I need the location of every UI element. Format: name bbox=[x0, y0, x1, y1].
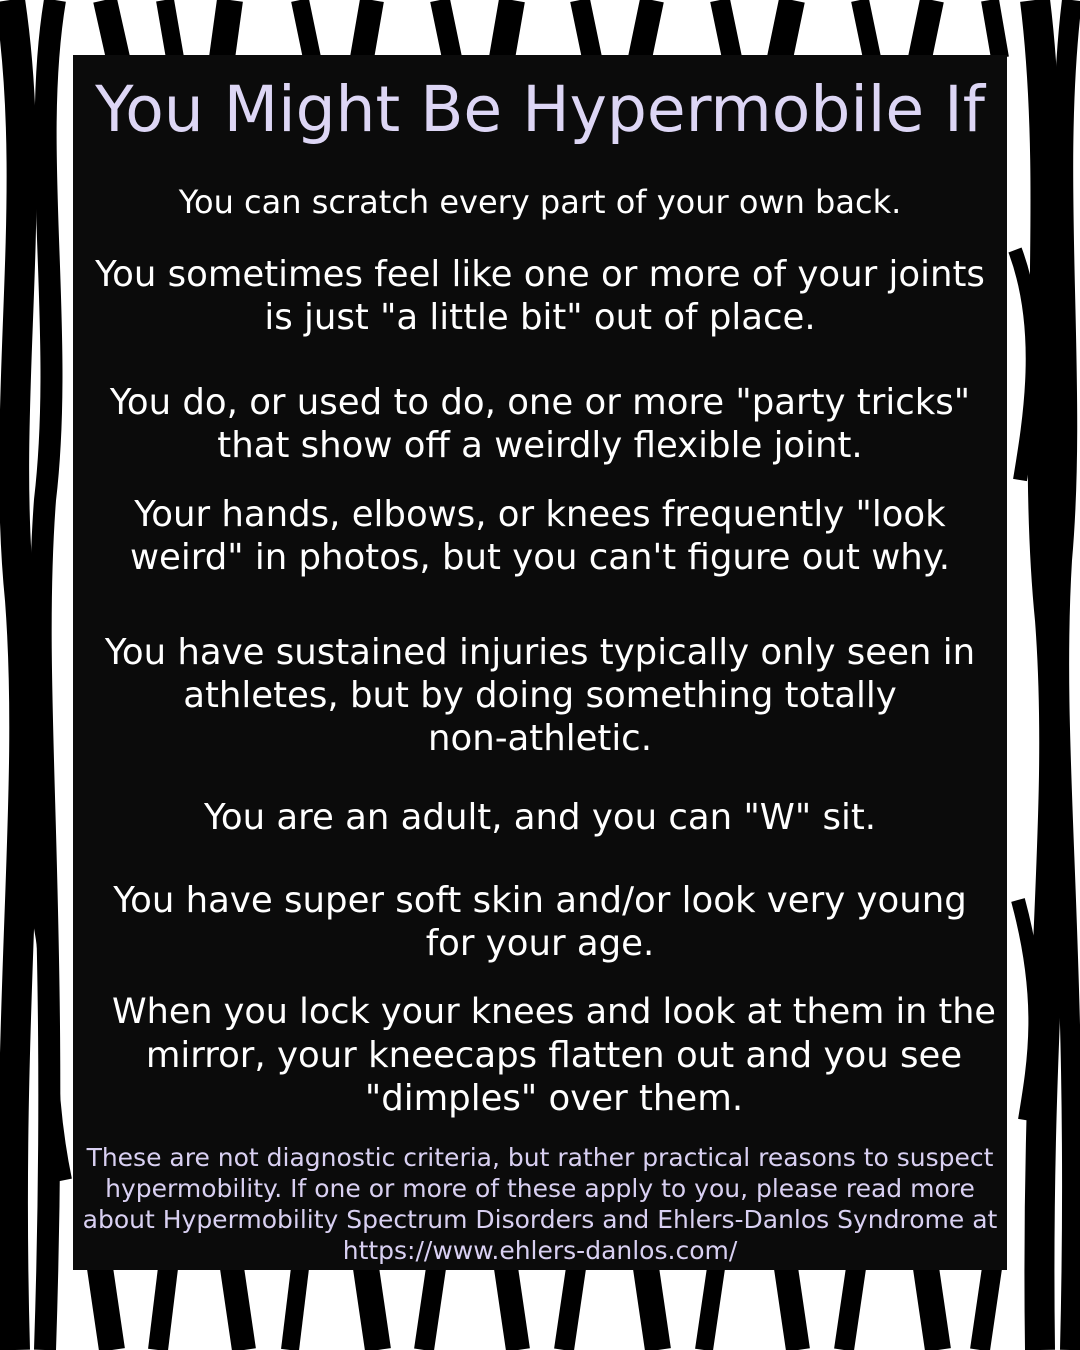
footer disclaimer: https://www.ehlers-danlos.com/ bbox=[343, 1236, 737, 1265]
item: joints out of place bbox=[95, 254, 985, 338]
item: soft skin bbox=[113, 880, 967, 964]
item: knee dimples bbox=[112, 992, 996, 1119]
item: knee dimples: mirror, your kneecaps flatten out and you see bbox=[146, 1035, 962, 1076]
panel: main list bbox=[73, 55, 1007, 1270]
item: soft skin: for your age. bbox=[426, 923, 654, 964]
item: party tricks: that show off a weirdly flexible joint. bbox=[217, 425, 863, 466]
item: athlete injuries: non-athletic. bbox=[428, 718, 652, 759]
item: athlete injuries: athletes, but by doing something totally bbox=[183, 675, 897, 716]
item: party tricks: You do, or used to do, one or more "party tricks" bbox=[110, 382, 970, 423]
title: You Might Be Hypermobile If bbox=[95, 73, 985, 146]
item: party tricks bbox=[110, 382, 970, 466]
item: knee dimples: "dimples" over them. bbox=[365, 1078, 743, 1119]
item: athlete injuries: You have sustained injuries typically only seen in bbox=[105, 632, 975, 673]
item: athlete injuries bbox=[104, 632, 975, 759]
item: look weird in photos bbox=[130, 494, 950, 578]
footer disclaimer: about Hypermobility Spectrum Disorders and Ehlers-Danlos Syndrome at bbox=[83, 1205, 997, 1234]
footer disclaimer: These are not diagnostic criteria, but rather practical reasons to suspect bbox=[87, 1143, 993, 1172]
item: W sit: You are an adult, and you can "W" sit. bbox=[204, 797, 876, 838]
item: knee dimples: When you lock your knees and look at them in the bbox=[112, 992, 996, 1032]
item: scratch back: You can scratch every part of your own back. bbox=[179, 183, 901, 221]
item: soft skin: You have super soft skin and/or look very young bbox=[113, 880, 967, 921]
item: look weird in photos: Your hands, elbows, or knees frequently "look bbox=[134, 494, 946, 535]
item: joints out of place: is just "a little bit" out of place. bbox=[264, 297, 816, 338]
footer disclaimer bbox=[83, 1143, 997, 1265]
item: look weird in photos: weird" in photos, but you can't figure out why. bbox=[130, 537, 950, 578]
footer disclaimer: hypermobility. If one or more of these apply to you, please read more bbox=[105, 1174, 975, 1203]
item: joints out of place: You sometimes feel like one or more of your joints bbox=[95, 254, 985, 295]
